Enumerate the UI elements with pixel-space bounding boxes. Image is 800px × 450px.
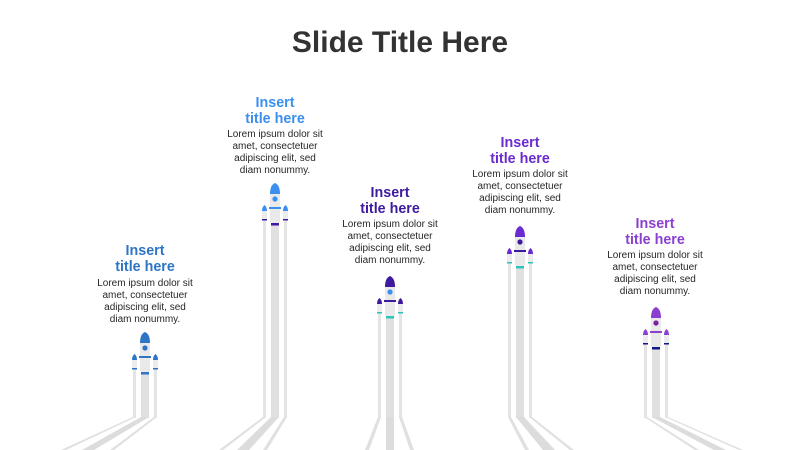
text: block 4: Insert: [501, 135, 540, 151]
rocket 5: [643, 307, 669, 350]
text: block 4: Lorem ipsum dolor sit: [472, 169, 568, 180]
text: block 4: adipiscing elit, sed: [479, 193, 561, 204]
text: block 1: [97, 243, 193, 325]
rocket 1: [132, 332, 158, 374]
text: block 5: Insert: [636, 216, 675, 232]
text: block 4: amet, consectetuer: [477, 181, 563, 192]
text: block 1: amet, consectetuer: [102, 290, 188, 301]
text: block 5: diam nonummy.: [620, 286, 690, 297]
text: block 4: title here: [490, 151, 550, 167]
rocket 3: [377, 276, 403, 318]
text: block 2: [227, 95, 323, 176]
text: block 2: adipiscing elit, sed: [234, 153, 316, 164]
trails: diagonal bends: [61, 417, 743, 450]
text: block 5: title here: [625, 232, 685, 248]
text: block 1: title here: [115, 259, 175, 275]
text: block 3: Insert: [371, 185, 410, 201]
text: block 3: title here: [360, 201, 420, 217]
rocket 4: [507, 226, 533, 268]
text: block 3: diam nonummy.: [355, 255, 425, 266]
text: block 3: adipiscing elit, sed: [349, 243, 431, 254]
text: block 1: diam nonummy.: [110, 314, 180, 325]
trails: vertical exhaust: [133, 219, 668, 418]
text: block 4: [472, 135, 568, 216]
text: block 5: Lorem ipsum dolor sit: [607, 250, 703, 261]
text: block 2: title here: [245, 111, 305, 127]
text: block 2: diam nonummy.: [240, 165, 310, 176]
text: block 1: adipiscing elit, sed: [104, 302, 186, 313]
text: block 4: diam nonummy.: [485, 205, 555, 216]
text: block 5: adipiscing elit, sed: [614, 274, 696, 285]
rocket 2: [262, 183, 288, 226]
text: block 5: [607, 216, 703, 297]
text: block 5: amet, consectetuer: [612, 262, 698, 273]
text: block 3: amet, consectetuer: [347, 231, 433, 242]
text: block 1: Insert: [126, 243, 165, 259]
text: block 3: Lorem ipsum dolor sit: [342, 219, 438, 230]
title: Slide Title Here: [292, 26, 508, 59]
text: block 1: Lorem ipsum dolor sit: [97, 278, 193, 289]
text: block 2: Insert: [256, 95, 295, 111]
text: block 2: amet, consectetuer: [232, 141, 318, 152]
text: block 2: Lorem ipsum dolor sit: [227, 129, 323, 140]
text: block 3: [342, 185, 438, 266]
